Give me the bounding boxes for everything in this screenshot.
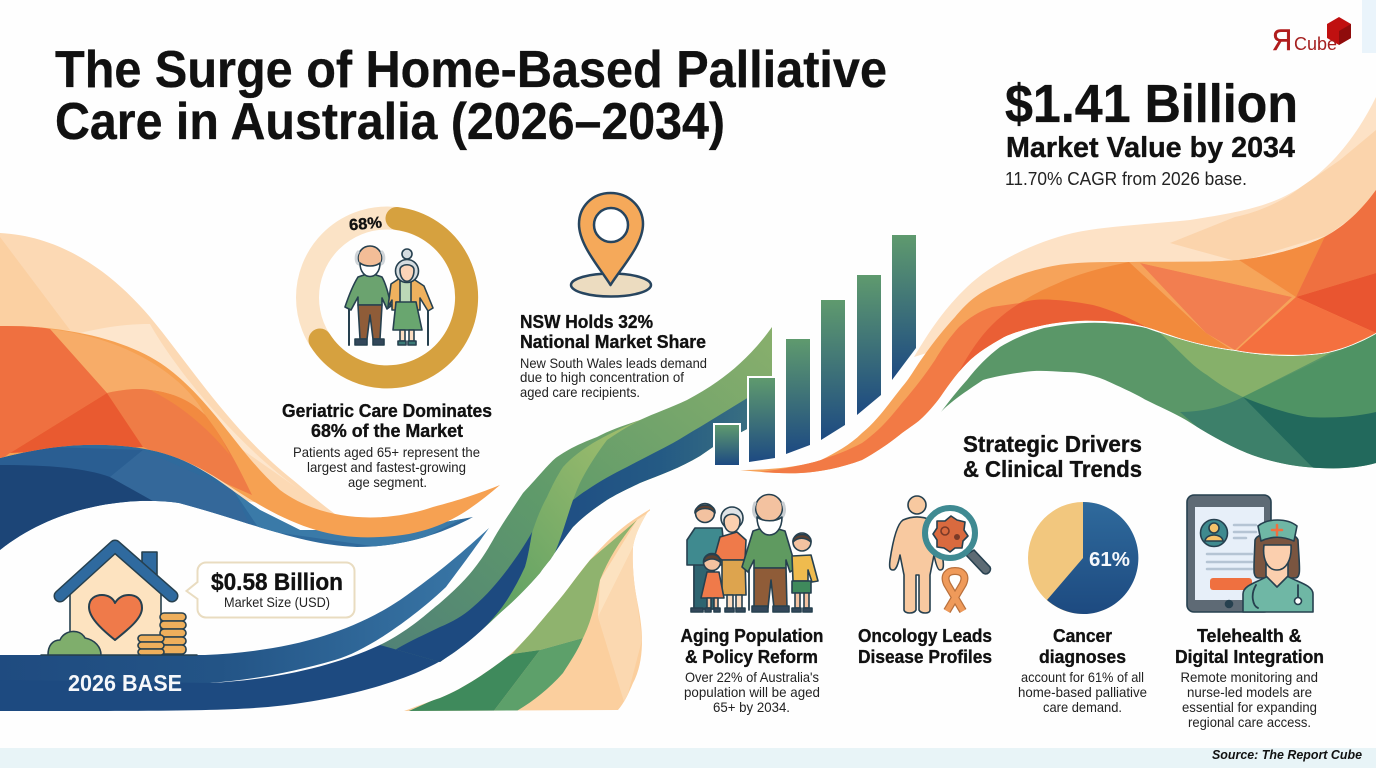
bottom ribbon: dark blue band: [0, 600, 460, 711]
telehealth body: Remote monitoring and: [1180, 669, 1318, 685]
callout: 2026 market size: $0.58 Billion: [211, 569, 343, 596]
aging population body: [684, 669, 820, 715]
bar chart: rising market: [713, 235, 916, 467]
right wave: green layer: [941, 322, 1376, 468]
telehealth heading: Telehealth &: [1197, 626, 1302, 646]
headline stat: market value: 11.70% CAGR from 2026 base.: [1005, 169, 1247, 189]
callout: 2026 market size: Market Size (USD): [224, 594, 330, 610]
aging population body: Over 22% of Australia's: [685, 669, 819, 685]
icon: location pin: [571, 193, 651, 296]
logo: Cube: [1294, 34, 1337, 54]
title: The Surge of Home-Based Palliative: [55, 41, 887, 99]
label: 2026 base: 2026 BASE: [68, 670, 182, 696]
telehealth heading: Digital Integration: [1175, 647, 1324, 667]
telehealth heading: [1175, 626, 1324, 667]
geriatric care body: [293, 444, 480, 490]
telehealth body: essential for expanding: [1182, 699, 1317, 715]
telehealth body: regional care access.: [1188, 714, 1311, 730]
cancer body: account for 61% of all: [1021, 669, 1144, 685]
aging population body: 65+ by 2034.: [713, 699, 790, 715]
source line: Source: The Report Cube: [1212, 747, 1362, 762]
middle ribbon: green and blue: [370, 320, 780, 670]
NSW heading: [520, 312, 706, 352]
aging population body: population will be aged: [684, 684, 820, 700]
headline stat: market value: [1005, 74, 1298, 189]
left wave: orange layer: [0, 320, 510, 545]
right wave: orange layer: [735, 185, 1376, 480]
NSW body: aged care recipients.: [520, 384, 640, 400]
NSW heading: National Market Share: [520, 332, 706, 352]
left wave: blue layer: [0, 444, 473, 550]
pie chart: cancer share 61%: [1028, 502, 1138, 614]
geriatric care heading: Geriatric Care Dominates: [282, 401, 492, 421]
title: [55, 41, 887, 151]
cancer body: care demand.: [1043, 699, 1122, 715]
NSW body: due to high concentration of: [520, 369, 684, 385]
cancer heading: [1039, 626, 1126, 667]
aging population heading: [680, 626, 824, 667]
geriatric care body: age segment.: [348, 474, 427, 490]
pie chart: cancer share 61%: 61%: [1089, 549, 1130, 571]
logo: [1272, 17, 1351, 57]
corner tint: [1362, 0, 1376, 53]
aging population heading: & Policy Reform: [685, 647, 818, 667]
oncology heading: [858, 626, 992, 667]
oncology heading: Disease Profiles: [858, 647, 992, 667]
strategic drivers heading: & Clinical Trends: [963, 456, 1142, 482]
icon: multigenerational family: [687, 494, 818, 612]
NSW body: New South Wales leads demand: [520, 355, 707, 371]
geriatric care body: Patients aged 65+ represent the: [293, 444, 480, 460]
strategic drivers heading: Strategic Drivers: [963, 431, 1142, 457]
icon: telehealth tablet and nurse: [1187, 495, 1313, 612]
headline stat: market value: Market Value by 2034: [1006, 132, 1295, 164]
title: Care in Australia (2026–2034): [55, 93, 725, 151]
lower flame wave: [404, 509, 650, 711]
cancer heading: Cancer: [1053, 626, 1112, 646]
headline stat: market value: $1.41 Billion: [1005, 74, 1298, 134]
donut chart: geriatric share: [308, 215, 467, 377]
icon: elderly couple: [345, 246, 433, 345]
NSW body: [520, 355, 707, 400]
cancer body: home-based palliative: [1018, 684, 1147, 700]
left wave: peach layer: [0, 233, 335, 514]
right wave: peach layer: [914, 97, 1376, 357]
donut chart: geriatric share: 68%: [348, 215, 383, 234]
geriatric care heading: [282, 401, 492, 441]
icon: house with heart and coins: [41, 546, 197, 655]
logo: Я: [1272, 24, 1292, 57]
telehealth body: nurse-led models are: [1187, 684, 1312, 700]
callout: 2026 market size: [186, 562, 354, 618]
aging population heading: Aging Population: [680, 626, 824, 646]
strategic drivers heading: [963, 431, 1142, 482]
geriatric care heading: 68% of the Market: [311, 421, 463, 441]
bottom ribbon: light blue band: [0, 528, 489, 690]
geriatric care body: largest and fastest-growing: [307, 459, 466, 475]
footer strip: [0, 748, 1376, 768]
icon: oncology magnifier and ribbon: [890, 496, 990, 613]
NSW heading: NSW Holds 32%: [520, 312, 653, 332]
cancer heading: diagnoses: [1039, 647, 1126, 667]
oncology heading: Oncology Leads: [858, 626, 992, 646]
cancer body: [1018, 669, 1147, 715]
telehealth body: [1180, 669, 1318, 730]
